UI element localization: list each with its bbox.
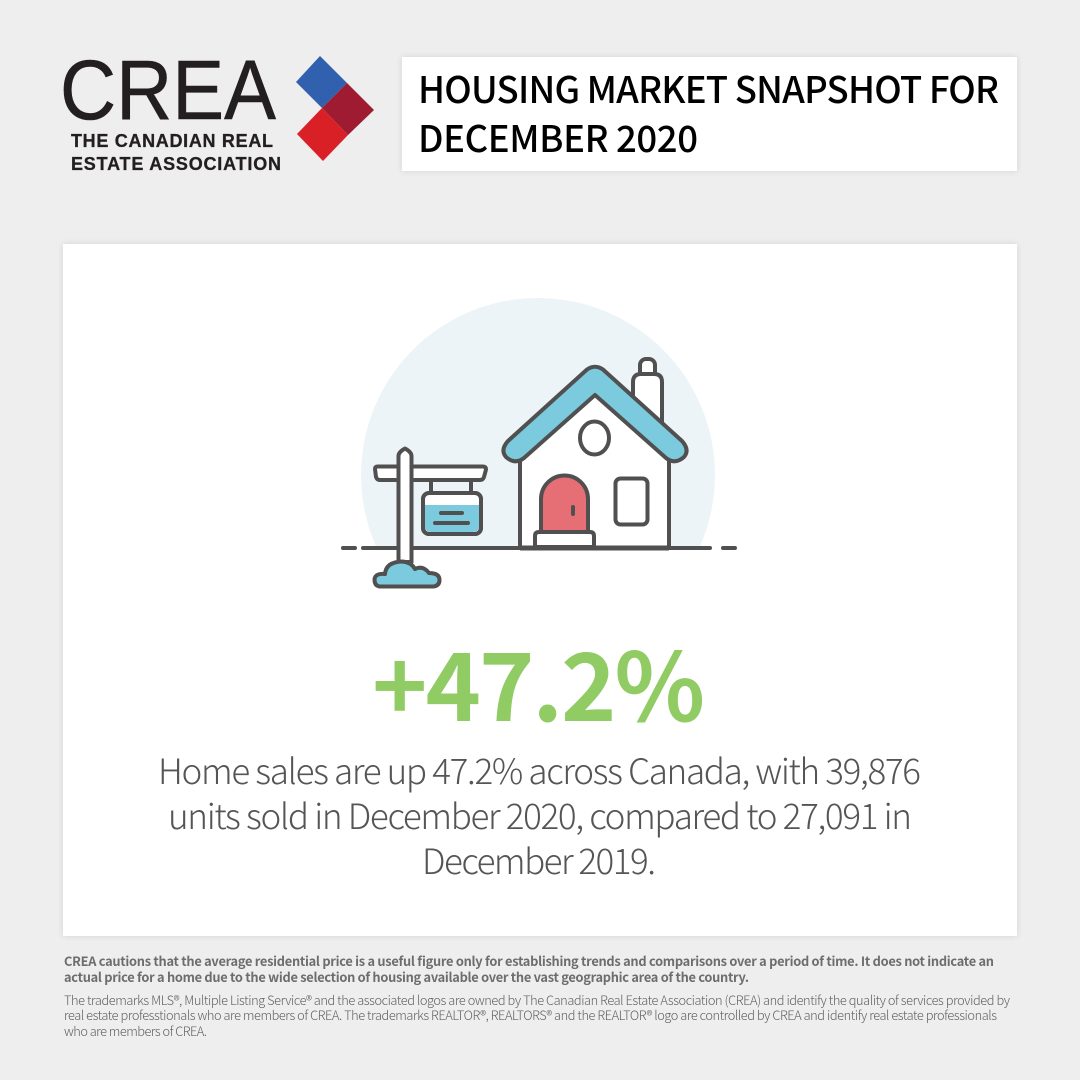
logo subtitle	[71, 131, 281, 174]
icon: bush	[374, 562, 440, 586]
logo wordmark: CREA	[60, 43, 276, 137]
icon: round window	[580, 422, 609, 454]
trademark note: The trademarks MLS®, Multiple Listing Service® and the associated logos are owned by The Canadian Real Estate Association (CREA) and identify the quality of services provided by	[64, 990, 1011, 1009]
icon: door	[541, 475, 588, 532]
icon: chimney	[633, 359, 662, 425]
description text: units sold in December 2020, compared to 27,091 in	[168, 789, 912, 840]
trademark note: who are members of CREA.	[64, 1021, 207, 1040]
title text: HOUSING MARKET SNAPSHOT FOR	[418, 61, 999, 114]
CREA logo	[60, 43, 374, 174]
logo diamonds	[296, 56, 374, 161]
description text	[158, 744, 921, 885]
title text: DECEMBER 2020	[418, 110, 698, 163]
house illustration	[341, 298, 737, 588]
caution note: actual price for a home due to the wide selection of housing available over the vast geographic area of the country.	[64, 967, 749, 986]
icon: house body	[520, 390, 669, 548]
backdrop circle	[361, 298, 715, 546]
caution note	[64, 951, 994, 986]
title panel	[402, 57, 1017, 171]
logo subtitle: THE CANADIAN REAL	[71, 131, 273, 151]
ground line	[343, 546, 735, 550]
description text: December 2019.	[422, 834, 656, 885]
caution note: CREA cautions that the average residential price is a useful figure only for establishing trends and comparisons over a period of time. It does not indicate an	[64, 951, 994, 970]
icon: sale sign	[375, 448, 486, 562]
sign hangers	[431, 480, 471, 493]
trademark note: real estate professtionals who are members of CREA. The trademarks REALTOR®, REALTORS® and the REALTOR® logo are controlled by CREA and identify real estate professionals	[64, 1005, 997, 1024]
sign post	[398, 448, 412, 562]
sign board	[423, 493, 481, 534]
description text: Home sales are up 47.2% across Canada, with 39,876	[158, 744, 921, 795]
trademark note	[64, 990, 1011, 1040]
icon: square window	[616, 478, 648, 524]
icon: door step	[535, 532, 594, 547]
title text	[418, 61, 999, 163]
main panel	[63, 244, 1017, 936]
logo subtitle: ESTATE ASSOCIATION	[71, 154, 281, 174]
icon: roof	[503, 367, 687, 461]
ground under house	[520, 546, 669, 550]
sign crossbar	[375, 466, 486, 480]
big percentage: +47.2%	[372, 613, 705, 749]
